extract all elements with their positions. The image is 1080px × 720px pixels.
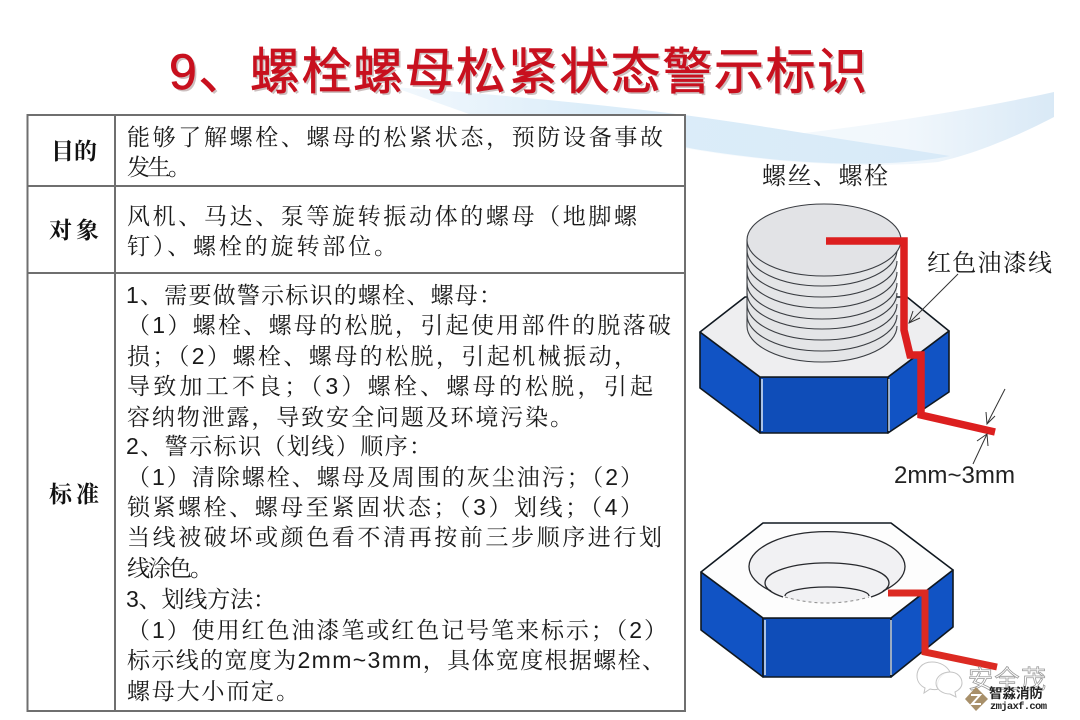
red paint line (888, 593, 997, 667)
icon: diamond logo (965, 687, 988, 711)
nut threaded hole (749, 531, 905, 603)
row: standard: 导致加工不良；（3）螺栓、螺母的松脱，引起 (127, 373, 653, 400)
watermark: logo and site (965, 685, 1047, 713)
row: standard: 标准 (49, 482, 99, 507)
icon: bolt with red paint line (700, 204, 995, 433)
row: standard: 1、需要做警示标识的螺栓、螺母： (126, 282, 502, 308)
row: target: 风机、马达、泵等旋转振动体的螺母（地脚螺 (127, 203, 638, 229)
label: line width 2mm~3mm: 2mm~3mm (894, 462, 1015, 489)
watermark: logo and site: 智淼消防 (989, 685, 1043, 701)
row: target (49, 203, 638, 259)
arrow: leader to red line (909, 274, 958, 323)
bolt hex base (700, 297, 949, 433)
title: 9、螺栓螺母松紧状态警示标识 (169, 44, 867, 100)
row: standard: 线涂色。 (127, 555, 213, 581)
table frame (27, 115, 685, 711)
nut hex body (701, 523, 953, 677)
arrow: line width dimension (973, 389, 1005, 464)
watermark: logo and site: zmjaxf.com (990, 701, 1047, 713)
row: standard: 螺母大小而定。 (127, 678, 299, 704)
label: screws and bolts: 螺丝、螺栓 (762, 163, 888, 190)
row: target: 钉）、螺栓的旋转部位。 (127, 233, 397, 259)
row: standard: （1）清除螺栓、螺母及周围的灰尘油污；（2） (127, 464, 643, 490)
row: purpose (51, 124, 663, 180)
row: standard: 标示线的宽度为2mm~3mm，具体宽度根据螺栓、 (127, 647, 665, 674)
row: standard (49, 282, 671, 704)
row: standard: （1）使用红色油漆笔或红色记号笔来标示；（2） (127, 617, 667, 643)
row: standard: 锁紧螺栓、螺母至紧固状态；（3）划线；（4） (127, 494, 643, 520)
icon: nut with red paint line (701, 523, 997, 677)
row: standard: 容纳物泄露，导致安全问题及环境污染。 (127, 404, 573, 431)
label: red paint line: 红色油漆线 (927, 250, 1052, 277)
icon: WeChat bubbles (917, 662, 962, 697)
row: standard: 损；（2）螺栓、螺母的松脱，引起机械振动， (127, 343, 637, 370)
red paint line (826, 241, 995, 432)
row: standard: 当线被破坏或颜色看不清再按前三步顺序进行划 (127, 524, 662, 550)
row: purpose: 发生。 (127, 154, 191, 180)
row: standard: 3、划线方法： (126, 586, 276, 612)
bolt threaded shaft (747, 204, 901, 362)
row: standard: 2、警示标识（划线）顺序： (126, 433, 432, 459)
row: target: 对象 (49, 218, 99, 243)
row: purpose: 目的 (51, 139, 97, 164)
title: 9、螺栓螺母松紧状态警示标识 (171, 46, 869, 102)
row: standard: （1）螺栓、螺母的松脱，引起使用部件的脱落破 (127, 312, 671, 339)
background: light blue swoosh (393, 87, 1054, 165)
watermark: WeChat account: 安全茂 (968, 666, 1046, 694)
watermark: WeChat account (917, 662, 1046, 697)
table: purpose, target, standard (27, 115, 685, 711)
row: purpose: 能够了解螺栓、螺母的松紧状态，预防设备事故 (127, 124, 663, 151)
